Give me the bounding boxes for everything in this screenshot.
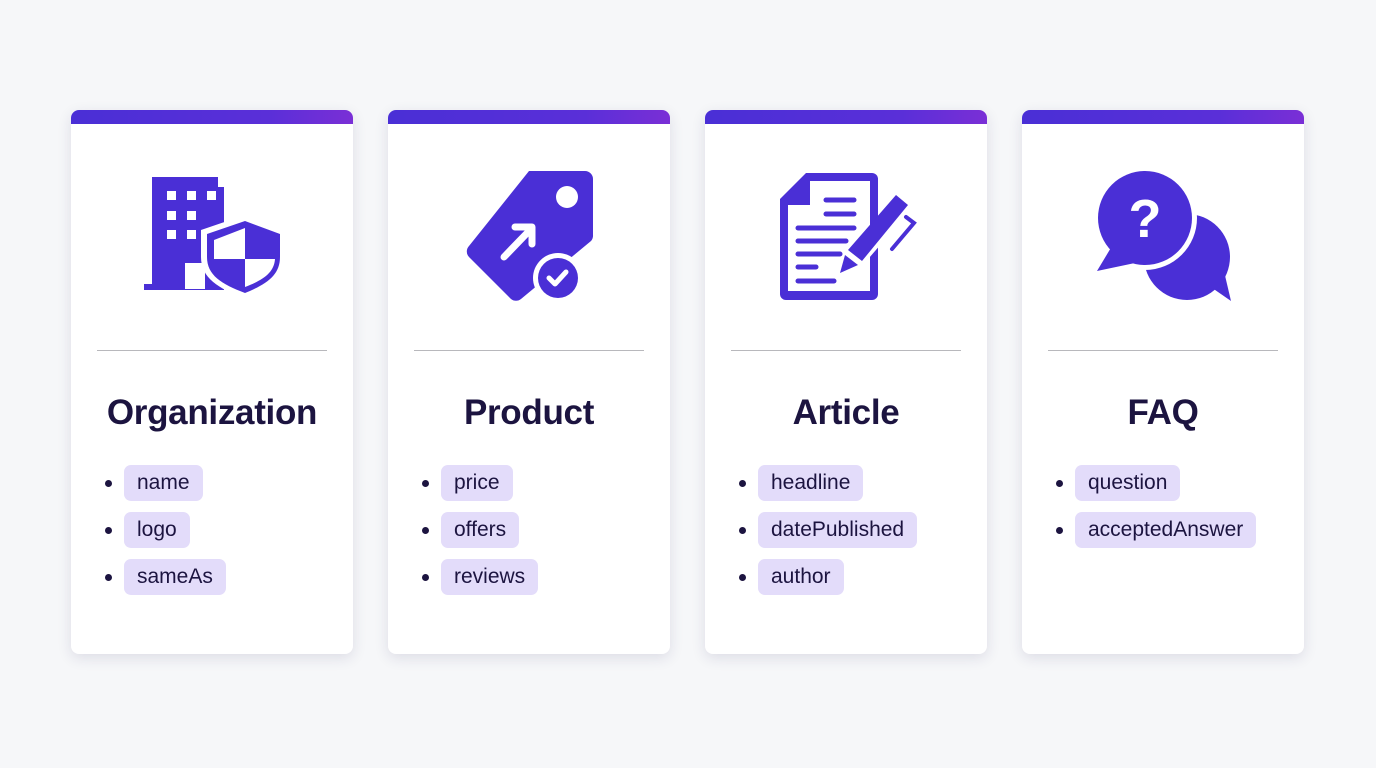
panel: Article bbox=[705, 110, 987, 654]
panel: Product bbox=[388, 110, 670, 654]
list bbox=[422, 465, 538, 595]
heading: Organization bbox=[107, 393, 317, 432]
panel: Organization: sameAs bbox=[137, 565, 213, 588]
list bbox=[105, 465, 226, 595]
panel: FAQ bbox=[1022, 110, 1304, 654]
panel: Product: reviews bbox=[454, 565, 525, 588]
panel: Organization: name bbox=[137, 471, 190, 494]
icon: speech bubbles bbox=[1097, 171, 1231, 301]
icon: price tag with check bbox=[466, 171, 594, 301]
panel: FAQ: acceptedAnswer bbox=[1088, 518, 1243, 541]
panel: Product: offers bbox=[454, 518, 506, 541]
panel: FAQ: question bbox=[1088, 471, 1167, 494]
heading: Article bbox=[793, 393, 899, 432]
icon: speech bubbles: ? bbox=[1128, 189, 1162, 249]
heading: FAQ bbox=[1127, 393, 1199, 432]
panel: Article: headline bbox=[771, 471, 850, 494]
panel: Article: datePublished bbox=[771, 518, 904, 541]
list bbox=[739, 465, 917, 595]
icon: building with shield bbox=[144, 177, 280, 293]
icon: document with pen bbox=[780, 173, 917, 300]
heading: Product bbox=[464, 393, 594, 432]
panel: Organization bbox=[71, 110, 353, 654]
panel: Article: author bbox=[771, 565, 831, 588]
panel: Organization: logo bbox=[137, 518, 177, 541]
list bbox=[1056, 465, 1256, 548]
panel: Product: price bbox=[454, 471, 500, 494]
